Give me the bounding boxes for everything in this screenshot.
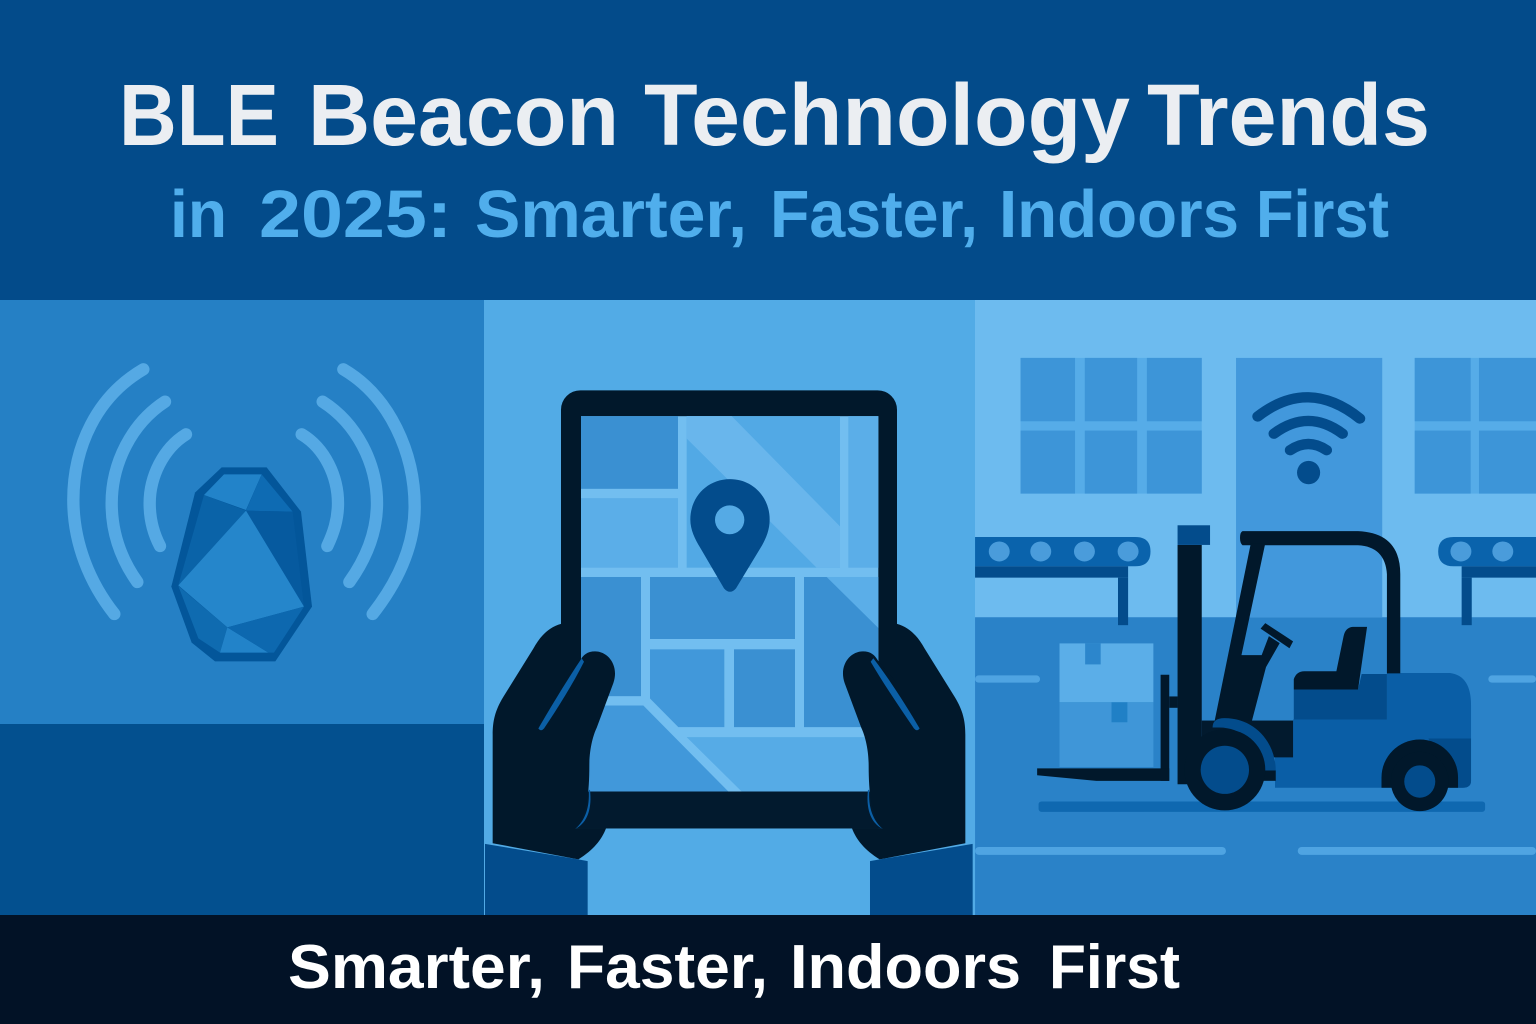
title: BLE (119, 67, 279, 164)
right window (1415, 358, 1536, 494)
forklift body (1275, 673, 1471, 788)
subtitle: in (170, 178, 227, 252)
right hand (843, 624, 973, 916)
front wheel (1184, 729, 1265, 810)
warehouse floor (975, 617, 1536, 915)
forklift seat (1294, 627, 1367, 690)
tablet (561, 390, 897, 828)
title: Beacon (308, 67, 619, 164)
footer band (0, 915, 1536, 1024)
subtitle: 2025: (259, 178, 452, 252)
icon: signal waves (73, 369, 415, 614)
icon: faceted beacon (171, 467, 312, 661)
title: Trends (1147, 67, 1430, 164)
footer tagline: Indoors (790, 933, 1021, 1002)
left window (1021, 358, 1202, 494)
footer tagline: Faster, (567, 933, 768, 1002)
cardboard box (1060, 643, 1153, 767)
subtitle: First (1256, 178, 1389, 252)
panel: beacon (0, 300, 484, 916)
forklift fender (1213, 718, 1276, 781)
forklift cab frame (1240, 531, 1400, 673)
forklift mast (1178, 545, 1202, 784)
subtitle: Indoors (999, 178, 1239, 252)
forklift steering wheel (1261, 623, 1293, 648)
footer tagline: First (1049, 933, 1180, 1002)
left hand (485, 624, 615, 916)
rear wheel (1382, 739, 1458, 811)
right conveyor (1438, 537, 1536, 625)
forklift chassis (1202, 721, 1293, 757)
forklift forks (1161, 675, 1169, 781)
map blocks (581, 416, 878, 792)
forklift (1037, 525, 1471, 811)
title: Technology (644, 67, 1130, 164)
panel: tablet map (484, 300, 975, 916)
subtitle: Faster, (770, 178, 978, 252)
doorway (1236, 358, 1382, 617)
panel: warehouse (975, 300, 1536, 916)
icon: wifi signal (1258, 397, 1360, 484)
left conveyor (975, 537, 1150, 625)
header band (0, 0, 1536, 300)
subtitle: Smarter, (475, 178, 747, 252)
footer tagline: Smarter, (288, 933, 545, 1002)
icon: location pin (690, 479, 770, 592)
